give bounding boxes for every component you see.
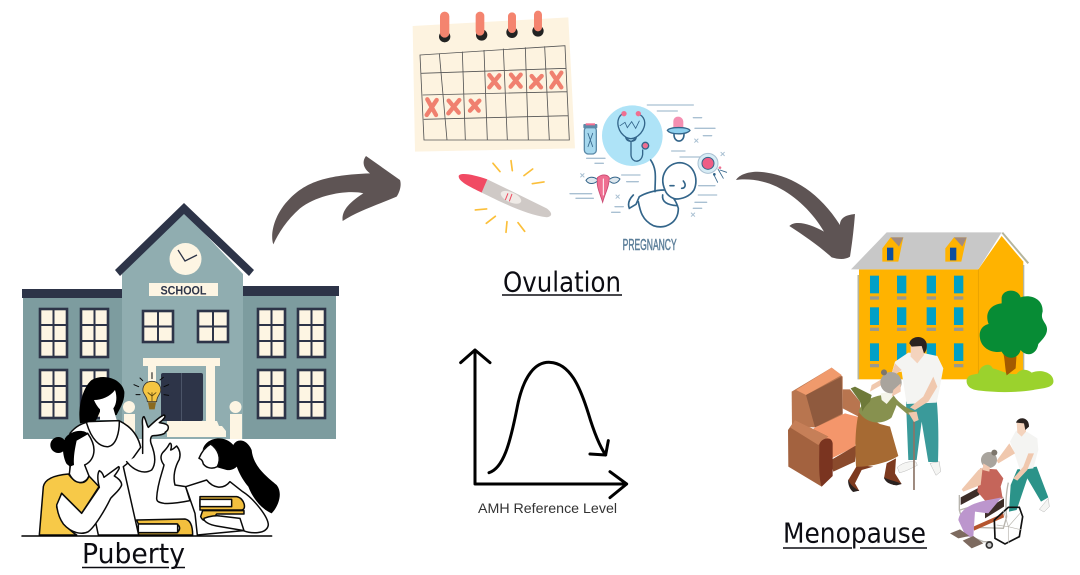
egg and sperm [698, 153, 727, 182]
stethoscope badge [602, 105, 663, 166]
pacifier [667, 117, 690, 141]
decorative lines [570, 105, 717, 212]
cross marks [581, 139, 724, 216]
cane [911, 419, 916, 490]
test window [499, 188, 523, 206]
building walls [858, 236, 1024, 379]
test red tip [459, 174, 487, 193]
student with ponytail and books [157, 438, 280, 535]
illustration: armchair [788, 368, 860, 487]
elderly woman [848, 369, 919, 492]
tree trunk [1003, 353, 1017, 375]
pregnancy caption: PREGNANCY [623, 237, 677, 254]
chair seat and arms [813, 413, 860, 458]
illustration: calendar [413, 11, 575, 152]
illustration: teacher and students [22, 373, 280, 536]
curve with arrow [489, 362, 608, 473]
calendar cross marks [427, 73, 561, 115]
label: Ovulation: Ovulation [503, 266, 621, 298]
roof [851, 232, 1028, 269]
school wings [23, 294, 336, 439]
student in yellow shirt [39, 431, 122, 535]
window sills [870, 296, 963, 367]
test sparkle rays [475, 161, 544, 232]
label: Menopause: Menopause [783, 518, 926, 550]
books on table [137, 519, 193, 535]
calendar binding rings [439, 11, 544, 42]
windows [870, 276, 963, 361]
chair back [792, 368, 843, 427]
school entrance [123, 358, 242, 439]
carer pushing [997, 418, 1049, 512]
illustration: care home [851, 232, 1053, 392]
arrow: puberty to ovulation [272, 156, 401, 244]
bush [967, 365, 1053, 392]
teacher [70, 377, 168, 535]
chart: AMH curve [461, 350, 627, 498]
arrow: ovulation to menopause [736, 172, 855, 259]
school centre block [122, 212, 243, 439]
illustration: carer helping woman with cane [848, 337, 943, 492]
school sign: SCHOOL [160, 284, 206, 298]
icon: light bulb [134, 373, 169, 409]
school roofs [22, 203, 339, 298]
illustration: pregnancy icons [570, 105, 727, 254]
fetus [629, 160, 696, 227]
test body [482, 179, 551, 217]
axes [461, 350, 627, 498]
clock [170, 243, 202, 275]
illustration: wheelchair and carer [950, 418, 1049, 548]
chart label: AMH Reference Level [478, 500, 617, 516]
test tube [583, 123, 597, 154]
school windows [40, 309, 325, 418]
calendar sheet [413, 17, 575, 152]
illustration: school building [22, 203, 339, 439]
illustration: pregnancy test [459, 161, 551, 232]
label: Puberty: Puberty [82, 538, 185, 570]
carer [870, 337, 943, 475]
uterus [586, 175, 620, 202]
ground line [22, 534, 272, 538]
tree crown [980, 291, 1047, 358]
woman in wheelchair [950, 450, 1003, 548]
calendar grid [420, 46, 569, 140]
wheelchair frame [959, 483, 1023, 548]
dormers [882, 237, 967, 262]
